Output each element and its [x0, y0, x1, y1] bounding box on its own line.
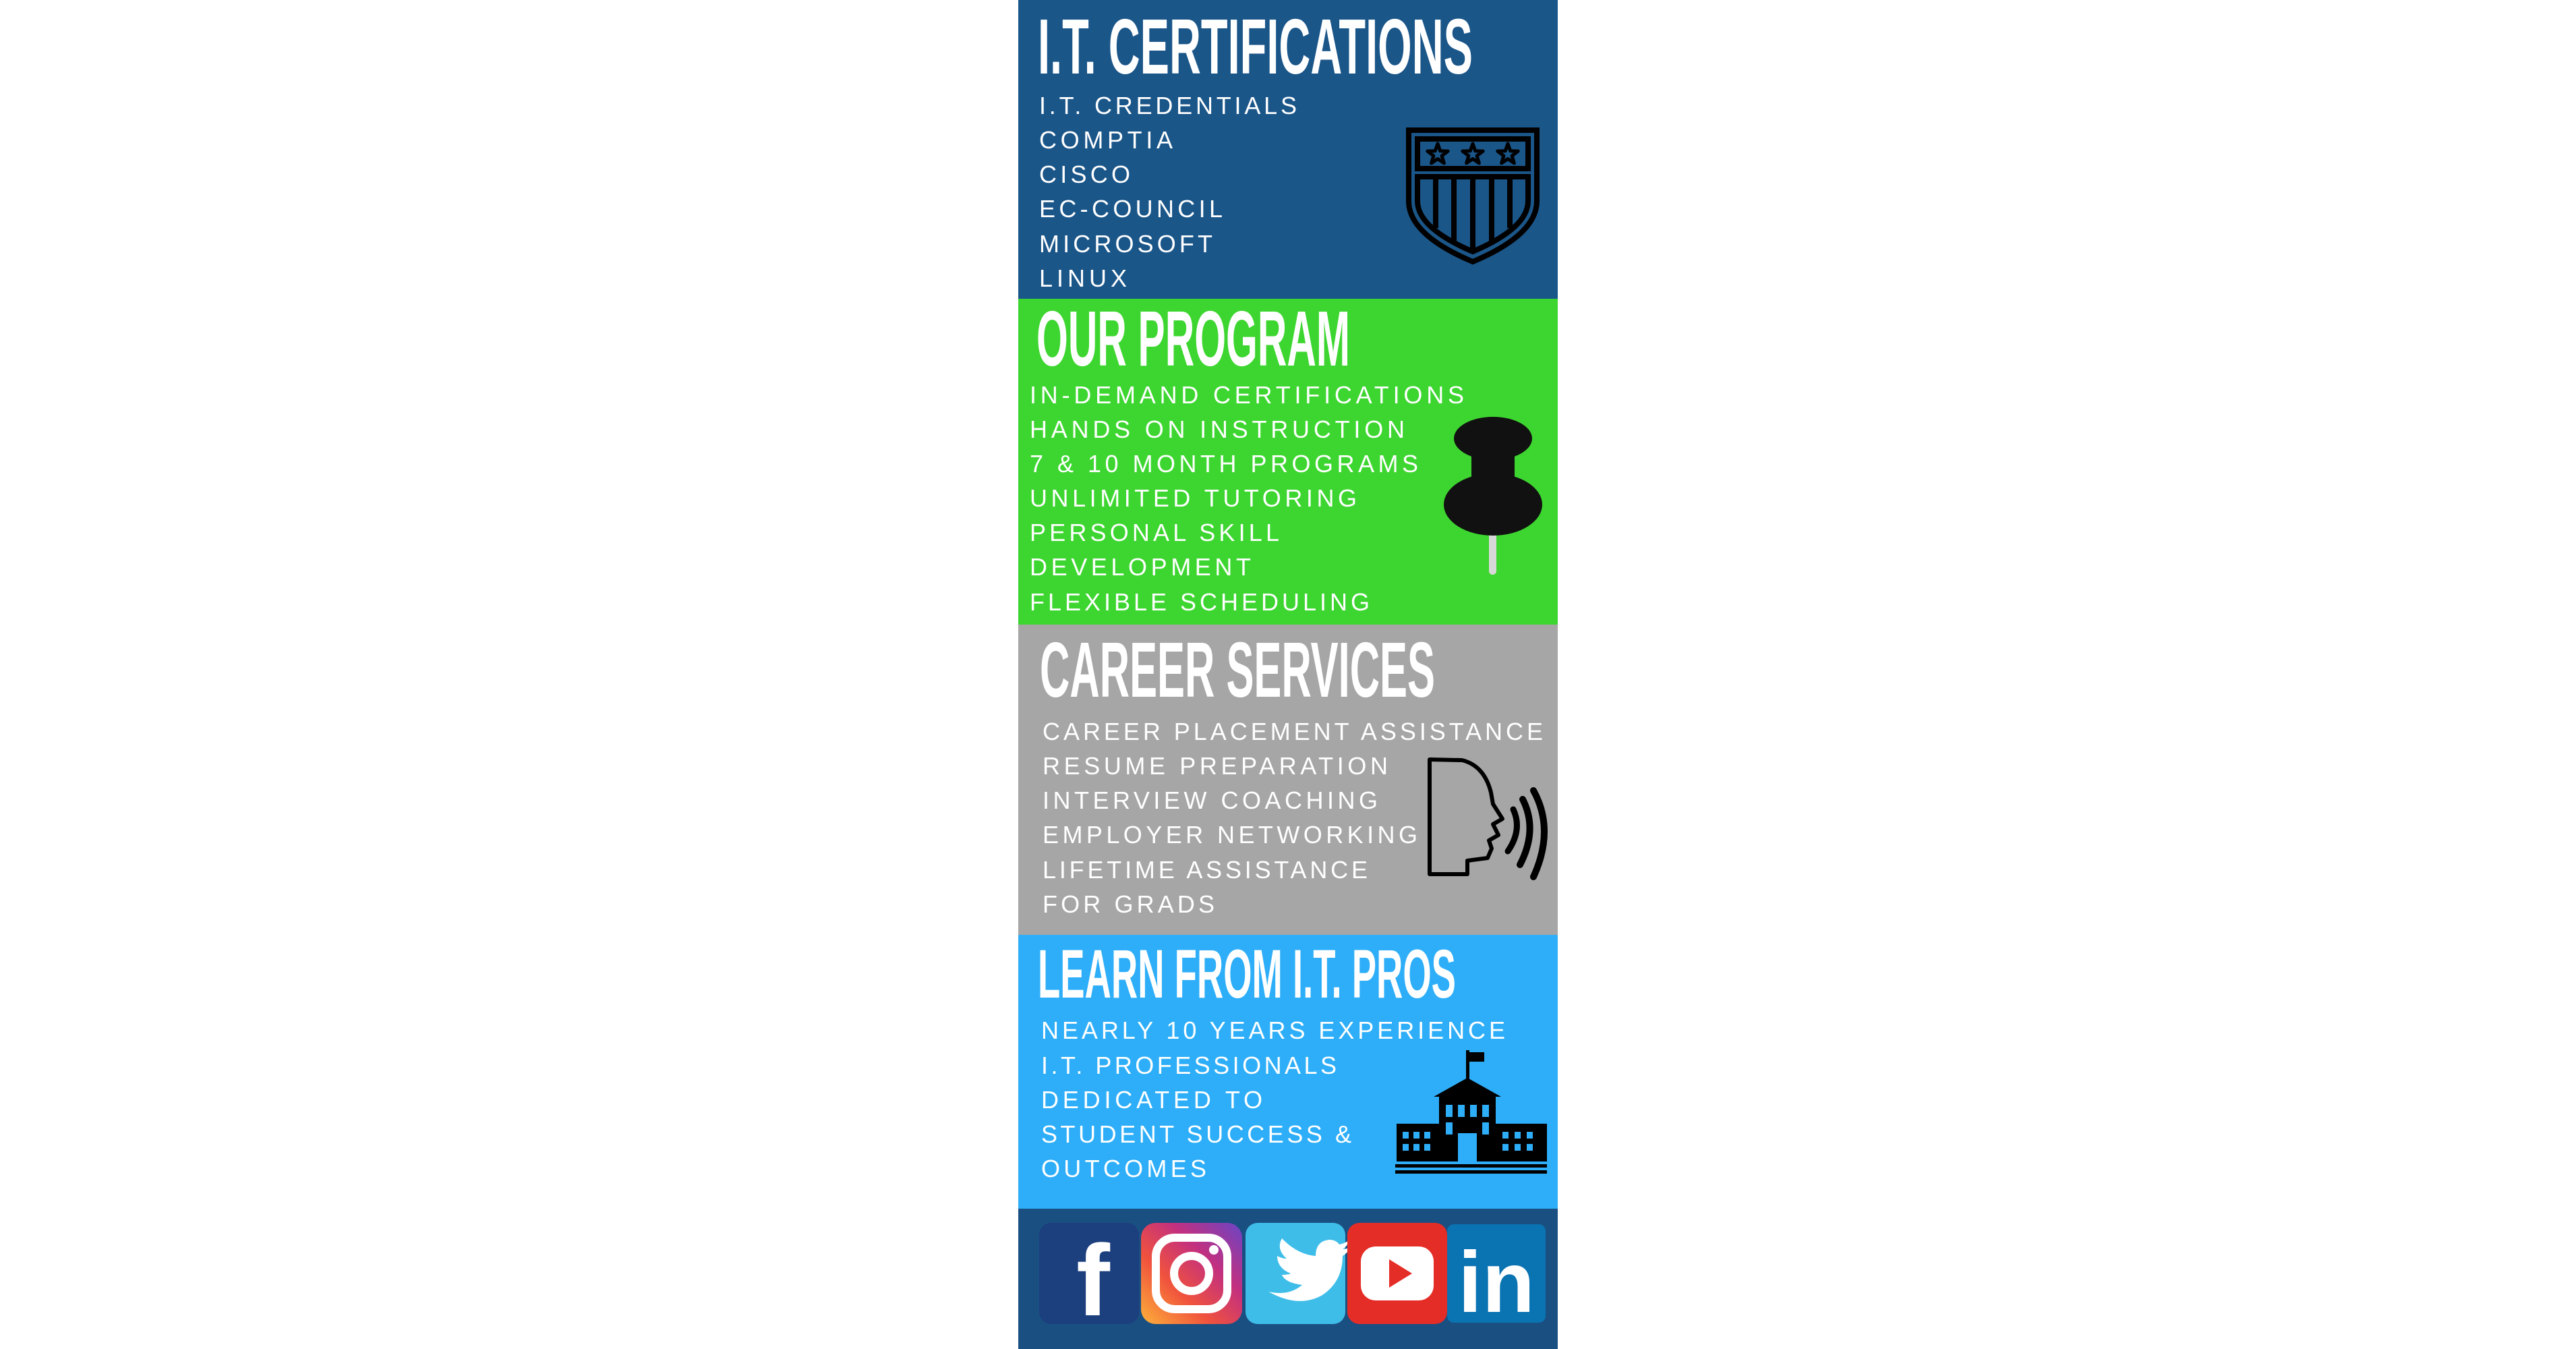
panel backgrounds — [1018, 0, 1558, 1349]
list: instructors: NEARLY 10 YEARS EXPERIENCE — [1041, 1016, 1505, 1044]
list: credentials: I.T. CREDENTIALS — [1039, 92, 1297, 119]
icon: facebook — [1039, 1223, 1139, 1337]
list: program features: IN-DEMAND CERTIFICATIONS — [1030, 381, 1464, 409]
panel: social footer — [1039, 1223, 1546, 1337]
list: instructors: DEDICATED TO — [1041, 1086, 1262, 1114]
panel: career services — [1040, 626, 1544, 918]
icon: facebook: f — [1076, 1224, 1111, 1337]
list: instructors: STUDENT SUCCESS & — [1041, 1120, 1351, 1148]
panel: learn from I.T. pros — [1038, 936, 1547, 1182]
list: services: RESUME PREPARATION — [1043, 752, 1388, 780]
icon: shield — [1409, 130, 1537, 262]
list: credentials: MICROSOFT — [1039, 230, 1212, 258]
list: services: CAREER PLACEMENT ASSISTANCE — [1043, 718, 1543, 745]
list: services: EMPLOYER NETWORKING — [1043, 821, 1417, 849]
list: program features: UNLIMITED TUTORING — [1030, 484, 1357, 512]
list: program features: HANDS ON INSTRUCTION — [1030, 415, 1405, 443]
heading: career services: CAREER SERVICES — [1040, 626, 1435, 714]
list: credentials: CISCO — [1039, 161, 1130, 188]
list: instructors: OUTCOMES — [1041, 1155, 1206, 1182]
icon: twitter — [1246, 1223, 1351, 1324]
heading: our program: OUR PROGRAM — [1036, 295, 1350, 382]
list: instructors: I.T. PROFESSIONALS — [1041, 1052, 1337, 1079]
list: services — [1043, 718, 1543, 918]
heading: learn from I.T. pros: LEARN FROM I.T. PROS — [1038, 936, 1456, 1012]
list: instructors — [1041, 1016, 1505, 1182]
list: program features — [1030, 381, 1464, 616]
heading: I.T. certifications: I.T. CERTIFICATIONS — [1038, 3, 1473, 90]
list: credentials: LINUX — [1039, 264, 1127, 292]
panel: our program — [1030, 295, 1542, 616]
icon: instagram — [1141, 1223, 1242, 1324]
list: credentials: COMPTIA — [1039, 126, 1173, 154]
icon: school building — [1395, 1050, 1547, 1174]
list: program features: 7 & 10 MONTH PROGRAMS — [1030, 450, 1418, 478]
list: services: FOR GRADS — [1043, 890, 1214, 918]
icon: speaking head — [1430, 759, 1544, 877]
list: program features: DEVELOPMENT — [1030, 553, 1251, 581]
list: credentials: EC-COUNCIL — [1039, 195, 1223, 223]
icon: linkedin: in — [1458, 1234, 1535, 1331]
icon: youtube — [1347, 1223, 1447, 1324]
icon: push pin — [1444, 417, 1542, 575]
list: program features: FLEXIBLE SCHEDULING — [1030, 588, 1370, 616]
list: credentials — [1039, 92, 1297, 292]
panel: I.T. certifications — [1038, 3, 1537, 292]
infographic content — [1030, 3, 1547, 1337]
list: services: INTERVIEW COACHING — [1043, 786, 1378, 814]
list: program features: PERSONAL SKILL — [1030, 519, 1279, 546]
list: services: LIFETIME ASSISTANCE — [1043, 856, 1368, 884]
